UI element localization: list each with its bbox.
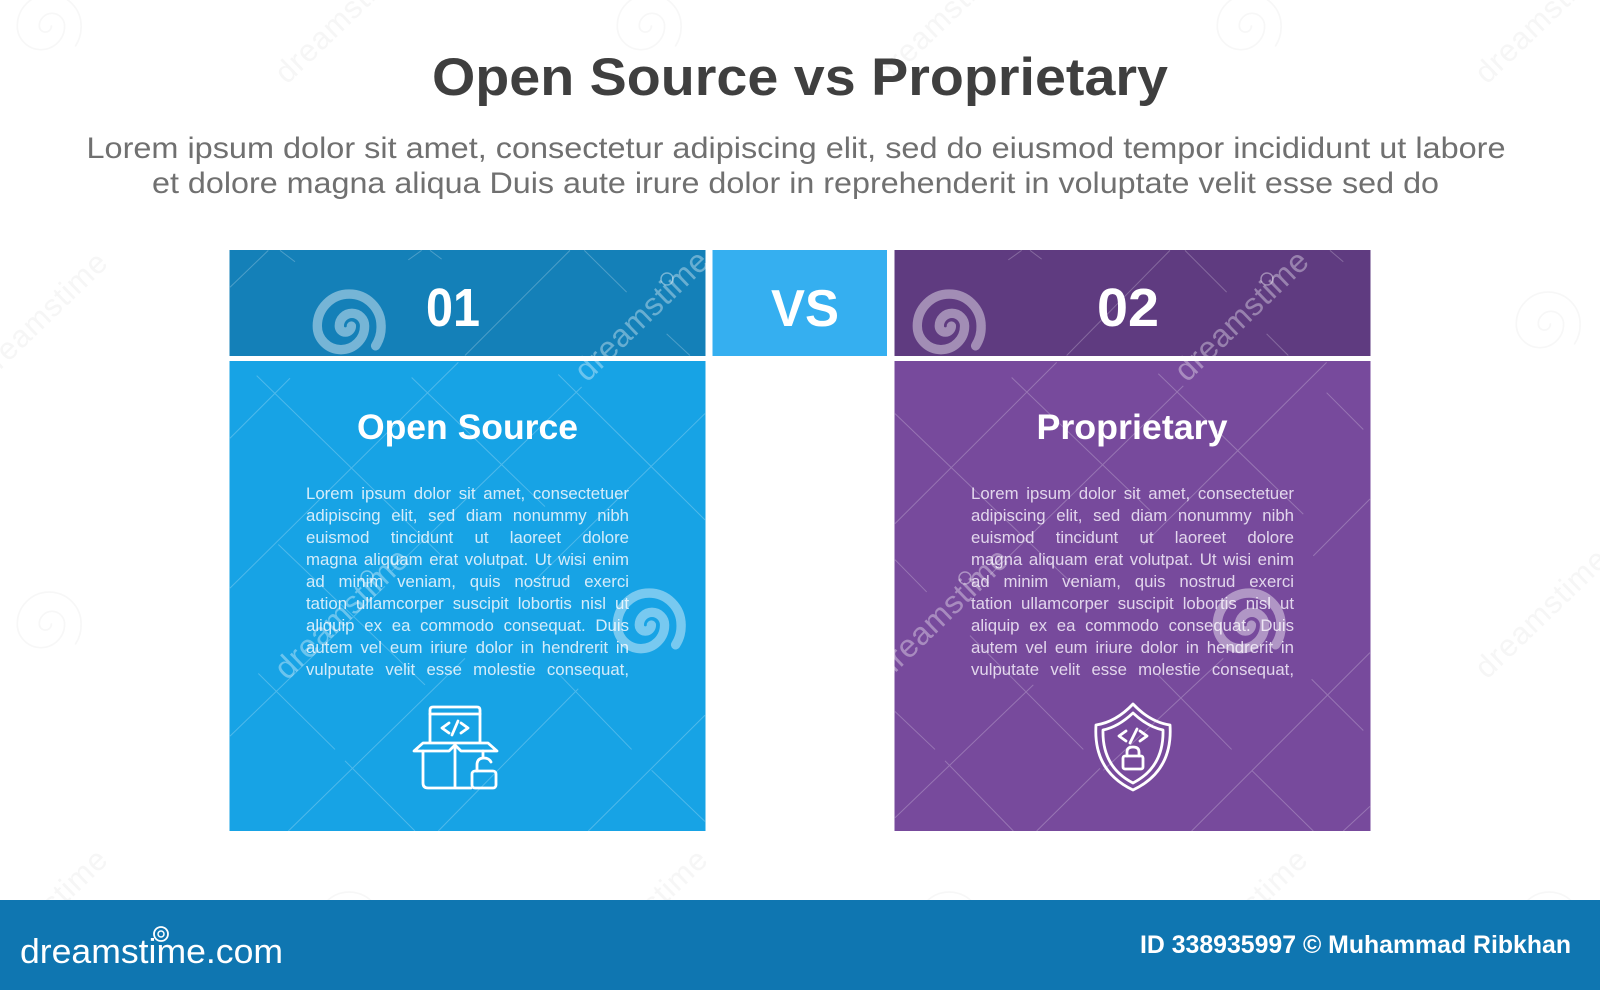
text block: proprietary description: [971, 484, 1294, 679]
icon: open box with code window and unlocked padlock: [414, 707, 497, 788]
text block: open source description: autem vel eum iriure dolor in hendrerit in: [306, 638, 629, 657]
text block: open source description: euismod tincidunt ut laoreet dolore: [306, 528, 629, 547]
footer credit: ID 338935997 © Muhammad Ribkhan: [1140, 931, 1571, 959]
text block: proprietary description: magna aliquam erat volutpat. Ut wisi enim: [971, 550, 1294, 569]
vs badge: [712, 250, 887, 356]
text block: open source description: Lorem ipsum dolor sit amet, consectetuer: [306, 484, 629, 503]
text: dreamstime: [267, 541, 416, 686]
text block: proprietary description: tation ullamcorper suscipit lobortis nisl ut: [971, 594, 1294, 613]
text block: proprietary description: vulputate velit esse molestie consequat,: [971, 660, 1294, 679]
panel: proprietary header: 02: [1097, 278, 1159, 338]
text block: open source description: [306, 484, 629, 679]
text block: proprietary description: euismod tincidunt ut laoreet dolore: [971, 528, 1294, 547]
title: Open Source vs Proprietary: [432, 48, 1169, 107]
footer bar: [0, 900, 1600, 990]
text: dreamstime: [1167, 243, 1316, 388]
subtitle: et dolore magna aliqua Duis aute irure dolor in reprehenderit in voluptate velit esse sed do: [152, 167, 1439, 200]
text block: open source description: ad minim veniam, quis nostrud exerci: [306, 572, 629, 591]
text block: open source description: tation ullamcorper suscipit lobortis nisl ut: [306, 594, 629, 613]
panel: open source header: 01: [426, 278, 480, 338]
text block: proprietary description: Lorem ipsum dolor sit amet, consectetuer: [971, 484, 1294, 503]
text: dreamstime: [867, 541, 1016, 686]
text block: open source description: vulputate velit esse molestie consequat,: [306, 660, 629, 679]
text block: open source description: adipiscing elit, sed diam nonummy nibh: [306, 506, 629, 525]
text block: proprietary description: ad minim veniam, quis nostrud exerci: [971, 572, 1294, 591]
vs badge: VS: [771, 280, 839, 338]
text: dreamstime: [568, 842, 714, 985]
text block: proprietary description: aliquip ex ea commodo consequat. Duis: [971, 616, 1294, 635]
subtitle: Lorem ipsum dolor sit amet, consectetur adipiscing elit, sed do eiusmod tempor incididunt ut labore: [86, 132, 1505, 165]
text: dreamstime: [1168, 842, 1314, 985]
footer logo: dreamstime.com: [20, 933, 283, 971]
subtitle: [86, 132, 1505, 200]
panel: proprietary header: [894, 250, 1370, 356]
panel: open source header: [230, 250, 706, 356]
panel: proprietary body: Proprietary: [1036, 408, 1228, 447]
icon: shield with code and padlock: [1096, 704, 1170, 790]
panel: proprietary body: [894, 361, 1370, 831]
text block: open source description: aliquip ex ea commodo consequat. Duis: [306, 616, 629, 635]
text: dreamstime: [567, 243, 716, 388]
text block: proprietary description: adipiscing elit, sed diam nonummy nibh: [971, 506, 1294, 525]
text block: proprietary description: autem vel eum iriure dolor in hendrerit in: [971, 638, 1294, 657]
panel: open source body: [230, 361, 706, 831]
text block: open source description: magna aliquam erat volutpat. Ut wisi enim: [306, 550, 629, 569]
panel: open source body: Open Source: [357, 408, 578, 447]
